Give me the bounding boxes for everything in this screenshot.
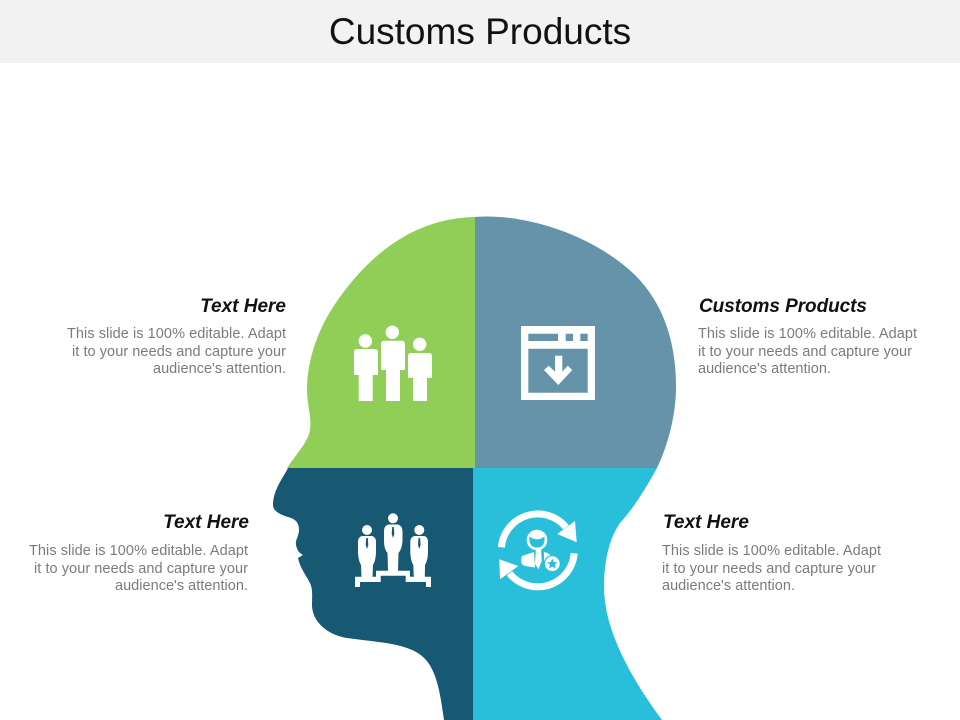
text block: top left: it to your needs and capture your bbox=[72, 344, 286, 360]
text block: top right: it to your needs and capture your bbox=[698, 344, 912, 360]
text block: bottom right bbox=[662, 512, 881, 594]
title band: Customs Products bbox=[329, 11, 631, 52]
icon: browser window with download arrow bbox=[521, 326, 595, 400]
text block: bottom left bbox=[29, 512, 249, 594]
icon: three people bbox=[354, 326, 432, 401]
title band bbox=[0, 0, 960, 63]
text block: bottom left: it to your needs and capture your bbox=[34, 561, 248, 577]
panel: cyan neck quadrant bbox=[473, 468, 662, 720]
icon: cycle arrows around person bbox=[499, 514, 577, 587]
text block: top left bbox=[67, 296, 286, 377]
text block: bottom left: This slide is 100% editable. Adapt bbox=[29, 543, 248, 559]
text block: bottom right: audience's attention. bbox=[662, 578, 795, 594]
text block: top left: This slide is 100% editable. Adapt bbox=[67, 326, 286, 342]
text block: bottom right: This slide is 100% editable. Adapt bbox=[662, 543, 881, 559]
text block: bottom right: it to your needs and capture your bbox=[662, 561, 876, 577]
panel: green head quadrant bbox=[287, 217, 475, 468]
panel: navy face quadrant bbox=[273, 468, 473, 720]
icon: businessmen on podium bbox=[355, 513, 431, 587]
text block: bottom right: Text Here bbox=[663, 512, 749, 533]
panel: steel blue head quadrant bbox=[475, 216, 676, 468]
text block: top right: Customs Products bbox=[699, 296, 867, 317]
text block: top left: Text Here bbox=[200, 296, 286, 317]
text block: bottom left: audience's attention. bbox=[115, 578, 248, 594]
text block: top right: audience's attention. bbox=[698, 361, 831, 377]
text block: top right: This slide is 100% editable. Adapt bbox=[698, 326, 917, 342]
text block: bottom left: Text Here bbox=[163, 512, 249, 533]
text block: top right bbox=[698, 296, 917, 377]
text block: top left: audience's attention. bbox=[153, 361, 286, 377]
